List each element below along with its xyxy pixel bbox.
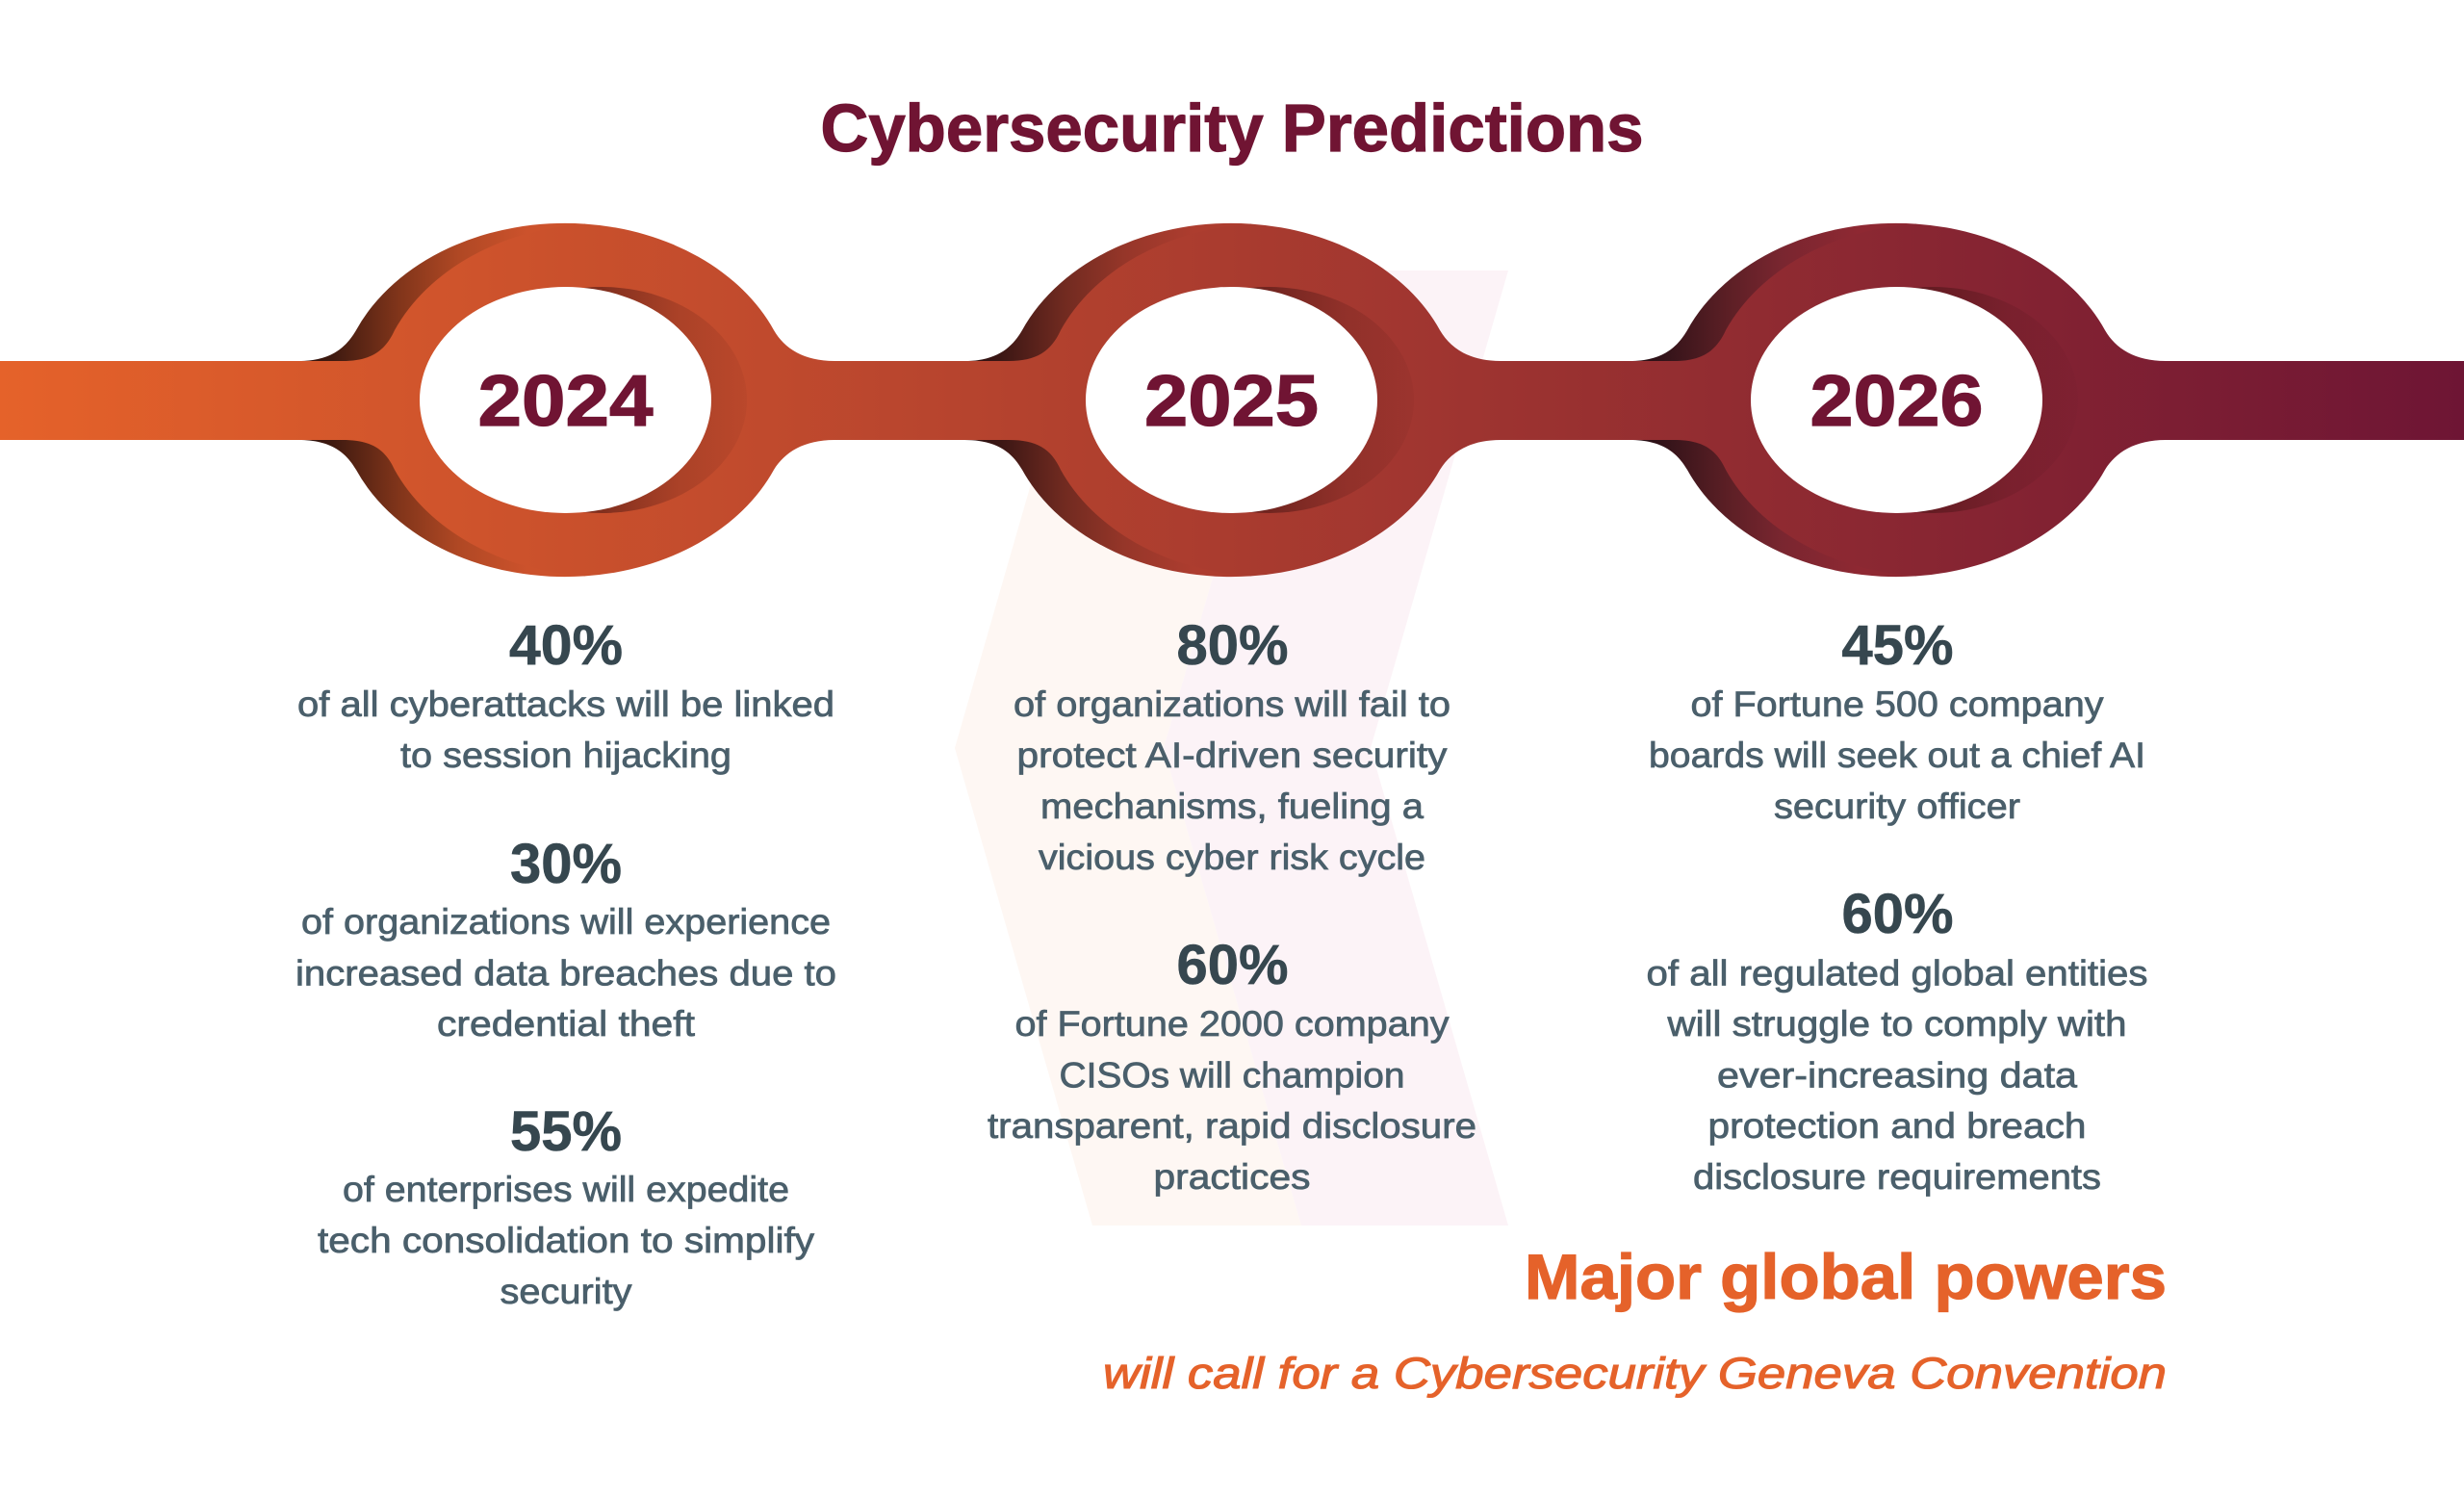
stat: 55% tech consolidation — [318, 1100, 815, 1311]
inner shadow: 2024 — [456, 287, 747, 513]
timeline node: 2026 — [1674, 224, 2166, 576]
stat: 45% chief AI security officer — [1649, 614, 2145, 826]
stat: 60% regulated entities: disclosure requirements — [1693, 1157, 2101, 1197]
stat: 80% AI-driven security: of organizations will fail to — [1014, 684, 1450, 724]
callout heading: Major global powers — [1525, 1241, 2167, 1312]
column: 2025 predictions — [988, 614, 1476, 1197]
white opening: 2026 — [1751, 287, 2042, 513]
stat: 45% chief AI security officer: security officer — [1774, 787, 2020, 826]
timeline node: 2024 — [343, 224, 834, 576]
stat: 45% chief AI security officer: of Fortune 500 company — [1690, 684, 2104, 724]
year label: 2025: 2025 — [1144, 360, 1319, 441]
stat: 60% regulated entities: ever-increasing data — [1717, 1055, 2077, 1096]
stat: 60% CISOs disclosure: CISOs will champion — [1059, 1055, 1405, 1096]
stat: 45% chief AI security officer: boards will seek out a chief AI — [1649, 736, 2145, 775]
white opening: 2024 — [420, 287, 711, 513]
stat: 30% data breaches: of organizations will experience — [301, 902, 831, 942]
stat: 55% tech consolidation: tech consolidation to simplify — [318, 1221, 815, 1260]
stat: 60% regulated entities: protection and breach — [1707, 1106, 2087, 1146]
stat: 40% session hijacking — [297, 614, 834, 775]
stat: 80% AI-driven security: protect AI-driven security — [1016, 736, 1448, 775]
callout: Geneva Convention — [1103, 1241, 2167, 1398]
column: 2026 predictions — [1646, 614, 2148, 1197]
stat: 80% AI-driven security: mechanisms, fueling a — [1040, 787, 1424, 826]
inner shadow: 2026 — [1787, 287, 2078, 513]
ring: 2026 — [1674, 224, 2166, 576]
stat: 60% CISOs disclosure: 60% — [1176, 934, 1288, 996]
stat: 60% CISOs disclosure: practices — [1153, 1157, 1311, 1197]
stat: 60% regulated entities — [1646, 883, 2148, 1197]
stat: 60% CISOs disclosure — [988, 934, 1476, 1197]
stat: 80% AI-driven security: vicious cyber risk cycle — [1039, 838, 1425, 877]
inner shadow: 2025 — [1123, 287, 1414, 513]
background chevron watermark — [955, 271, 1508, 1226]
stat: 60% CISOs disclosure: transparent, rapid disclosure — [988, 1106, 1476, 1146]
column: 2024 predictions — [295, 614, 836, 1311]
stat: 30% data breaches — [295, 833, 836, 1044]
year label: 2026: 2026 — [1810, 360, 1983, 441]
timeline band — [0, 361, 2464, 440]
title: Cybersecurity Predictions — [820, 90, 1644, 166]
year label: 2024: 2024 — [477, 360, 654, 441]
stat: 30% data breaches: 30% — [510, 833, 622, 895]
stat: 60% CISOs disclosure: of Fortune 2000 company — [1014, 1004, 1450, 1044]
stat: 55% tech consolidation: security — [500, 1272, 632, 1311]
stat: 60% regulated entities: will struggle to comply with — [1666, 1004, 2127, 1044]
stat: 30% data breaches: credential theft — [437, 1004, 696, 1044]
node shadows: back silhouettes behind the timeline — [298, 223, 1916, 577]
stat: 45% chief AI security officer: 45% — [1842, 614, 1954, 677]
stat: 40% session hijacking: 40% — [509, 614, 623, 677]
ring: 2025 — [1009, 224, 1501, 576]
ring: 2024 — [343, 224, 834, 576]
stat: 40% session hijacking: of all cyberattacks will be linked — [297, 684, 834, 724]
stat: 55% tech consolidation: 55% — [510, 1100, 622, 1163]
stat: 55% tech consolidation: of enterprises will expedite — [343, 1170, 789, 1209]
callout subheading: will call for a Cybersecurity Geneva Convention — [1103, 1349, 2167, 1398]
timeline node: 2025 — [1009, 224, 1501, 576]
stat: 60% regulated entities: 60% — [1842, 883, 1954, 945]
stat: 60% regulated entities: of all regulated global entities — [1646, 953, 2148, 994]
stat: 80% AI-driven security: 80% — [1176, 614, 1288, 677]
stat: 30% data breaches: increased data breaches due to — [295, 953, 836, 994]
white opening: 2025 — [1086, 287, 1377, 513]
stat: 80% AI-driven security — [1014, 614, 1450, 877]
stat: 40% session hijacking: to session hijacking — [400, 736, 732, 775]
